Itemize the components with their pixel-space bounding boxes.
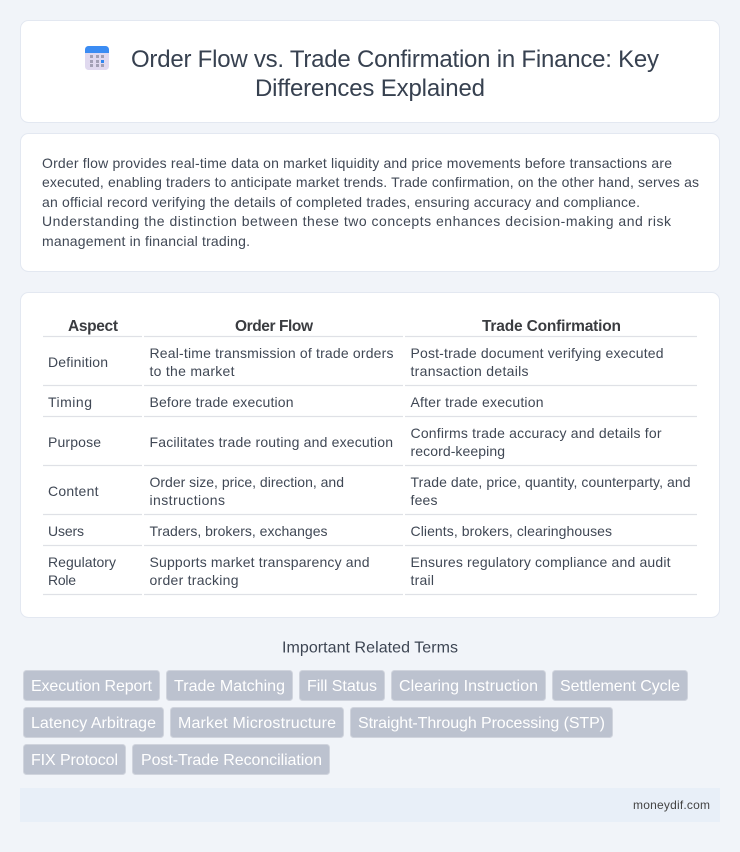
panel: introduction text: an official record verifying the details of completed trades, ensuring accuracy and compliance. xyxy=(42,194,640,210)
tag row 1: Clearing Instruction xyxy=(399,678,538,695)
row: users: Users xyxy=(48,523,84,539)
row: content: Content xyxy=(48,483,99,499)
title: Differences Explained xyxy=(255,75,485,102)
row: users xyxy=(48,523,612,539)
row: purpose: Facilitates trade routing and execution xyxy=(150,434,393,450)
row: definition: transaction details xyxy=(410,363,528,379)
tag row 2: Straight-Through Processing (STP) xyxy=(358,715,605,732)
row: timing: After trade execution xyxy=(410,394,544,410)
panel: title card xyxy=(20,20,720,122)
row: users: Traders, brokers, exchanges xyxy=(150,523,328,539)
row: regulatory role: trail xyxy=(410,572,434,588)
tag row 3 xyxy=(24,744,330,774)
row: regulatory role: Regulatory xyxy=(48,554,116,570)
tag row 1: Settlement Cycle xyxy=(560,678,680,695)
tag row 2: Latency Arbitrage xyxy=(31,715,156,732)
row: timing xyxy=(48,394,544,410)
table header xyxy=(68,318,621,335)
footer: moneydif.com xyxy=(633,798,710,812)
row: regulatory role: Role xyxy=(48,572,76,588)
row: definition: Real-time transmission of trade orders xyxy=(150,345,394,361)
row: regulatory role xyxy=(48,554,671,588)
table header: Order Flow xyxy=(235,318,314,335)
tag row 1: Trade Matching xyxy=(174,678,285,695)
row: content: Order size, price, direction, and xyxy=(150,474,344,490)
row: regulatory role: Ensures regulatory compliance and audit xyxy=(410,554,671,570)
row: definition: Post-trade document verifying executed xyxy=(410,345,664,361)
row: timing: Before trade execution xyxy=(150,394,294,410)
panel: related term tags xyxy=(24,670,688,774)
row: definition: Definition xyxy=(48,354,108,370)
row: content: instructions xyxy=(150,492,225,508)
row: users: Clients, brokers, clearinghouses xyxy=(410,523,612,539)
table header: Aspect xyxy=(68,318,118,335)
row: content xyxy=(48,474,690,508)
table header: Trade Confirmation xyxy=(482,318,621,335)
heading: related terms: Important Related Terms xyxy=(282,640,458,656)
tag row 1: Execution Report xyxy=(31,678,153,695)
panel: introduction text: Order flow provides real-time data on market liquidity and price movements before transactions are xyxy=(42,155,672,171)
row: purpose xyxy=(48,425,662,459)
panel: introduction text xyxy=(20,134,720,272)
panel: introduction text: management in financial trading. xyxy=(42,233,250,249)
tag row 3: FIX Protocol xyxy=(31,752,118,769)
row: content: Trade date, price, quantity, counterparty, and xyxy=(410,474,690,490)
tag row 1 xyxy=(24,670,688,700)
row: regulatory role: order tracking xyxy=(150,572,238,588)
panel: introduction text: executed, enabling traders to anticipate market trends. Trade confirmation, on the other hand, serves as xyxy=(42,174,699,190)
tag row 1: Fill Status xyxy=(307,678,377,695)
row: purpose: Confirms trade accuracy and details for xyxy=(410,425,662,441)
row: definition xyxy=(48,345,664,379)
footer xyxy=(20,788,720,822)
table rules xyxy=(43,336,697,594)
panel: introduction text: Understanding the distinction between these two concepts enhances decision-making and risk xyxy=(42,213,672,229)
row: content: fees xyxy=(410,492,438,508)
panel: comparison table xyxy=(20,292,720,618)
row: definition: to the market xyxy=(150,363,235,379)
row: regulatory role: Supports market transparency and xyxy=(150,554,370,570)
title xyxy=(131,46,659,102)
tag row 2 xyxy=(24,708,612,738)
icon: calendar xyxy=(85,46,109,70)
tag row 3: Post-Trade Reconciliation xyxy=(141,752,322,769)
row: timing: Timing xyxy=(48,394,92,410)
title: Order Flow vs. Trade Confirmation in Finance: Key xyxy=(131,46,659,73)
tag row 2: Market Microstructure xyxy=(178,715,336,732)
row: purpose: Purpose xyxy=(48,434,101,450)
row: purpose: record-keeping xyxy=(410,443,505,459)
